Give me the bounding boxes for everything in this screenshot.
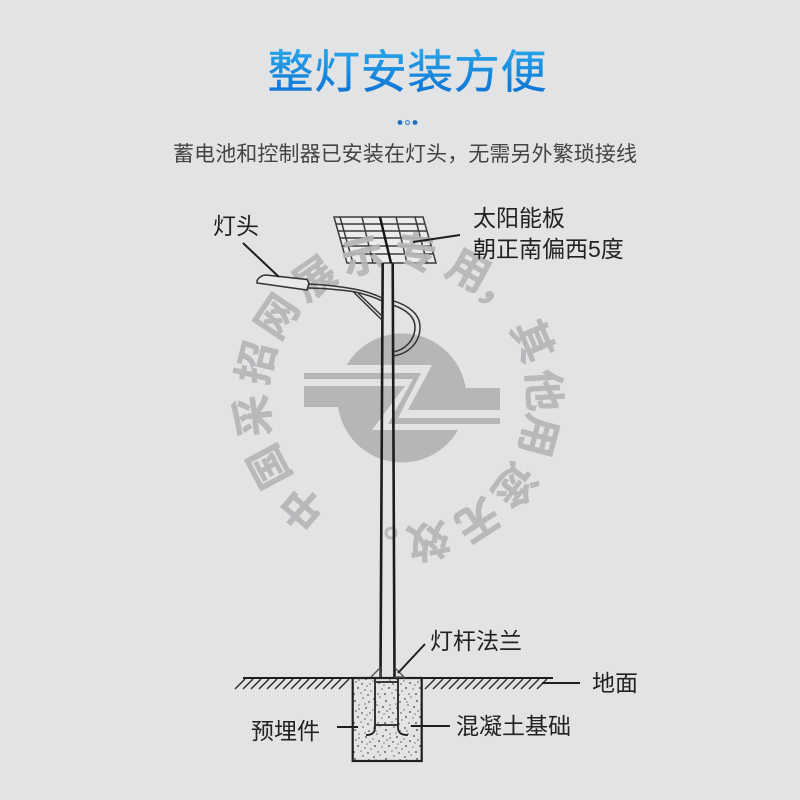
leader: solar panel: [413, 235, 460, 242]
label: solar panel orientation: 朝正南偏西5度: [473, 236, 624, 262]
concrete foundation: [353, 678, 422, 761]
lamp head and arm: [257, 275, 382, 320]
watermark ring text: 途: [483, 455, 546, 516]
watermark ring text: 效: [403, 513, 454, 568]
watermark ring text: 展: [284, 248, 345, 310]
leader: concrete foundation: [411, 725, 450, 727]
label: solar panel: 太阳能板: [473, 205, 565, 231]
subtitle: 蓄电池和控制器已安装在灯头，无需另外繁琐接线: [173, 143, 637, 166]
ground line: [243, 677, 553, 679]
title dots: [398, 120, 417, 125]
lamp hook arm: [393, 301, 420, 356]
label: ground: 地面: [592, 670, 638, 696]
watermark ring text: ，: [470, 265, 533, 327]
ground hatching left: [235, 679, 349, 689]
watermark ring text: 采: [228, 392, 279, 439]
leader: pole flange: [398, 644, 425, 673]
label: embedded part: 预埋件: [251, 718, 320, 744]
leader: lamp head: [243, 243, 279, 277]
flange: [371, 668, 404, 677]
lamp pole: [380, 263, 394, 678]
solar panel: [334, 217, 436, 263]
watermark ring text: 网: [246, 286, 309, 347]
watermark ring text: 用: [439, 240, 498, 301]
watermark ring text: 用: [510, 409, 567, 462]
leader: embedded part: [337, 726, 358, 728]
watermark ring text: 国: [239, 437, 300, 496]
watermark ring text: 示: [337, 229, 389, 285]
label: lamp head: 灯头: [213, 213, 259, 239]
watermark ring text: 招: [229, 337, 285, 389]
watermark ring text: 专: [392, 228, 439, 279]
ground hatching right: [425, 679, 547, 689]
leader: ground: [542, 682, 580, 684]
watermark ring text: [228, 228, 568, 568]
label: concrete foundation: 混凝土基础: [456, 713, 571, 739]
label: pole flange: 灯杆法兰: [430, 628, 522, 654]
watermark ring text: 其: [502, 313, 562, 370]
title: 整灯安装方便: [268, 46, 546, 98]
watermark ring text: 中: [271, 476, 334, 539]
watermark ring text: 无: [447, 489, 508, 551]
watermark logo: [300, 334, 505, 462]
watermark ring text: 他: [519, 368, 568, 413]
anchor bolts: [366, 678, 408, 735]
